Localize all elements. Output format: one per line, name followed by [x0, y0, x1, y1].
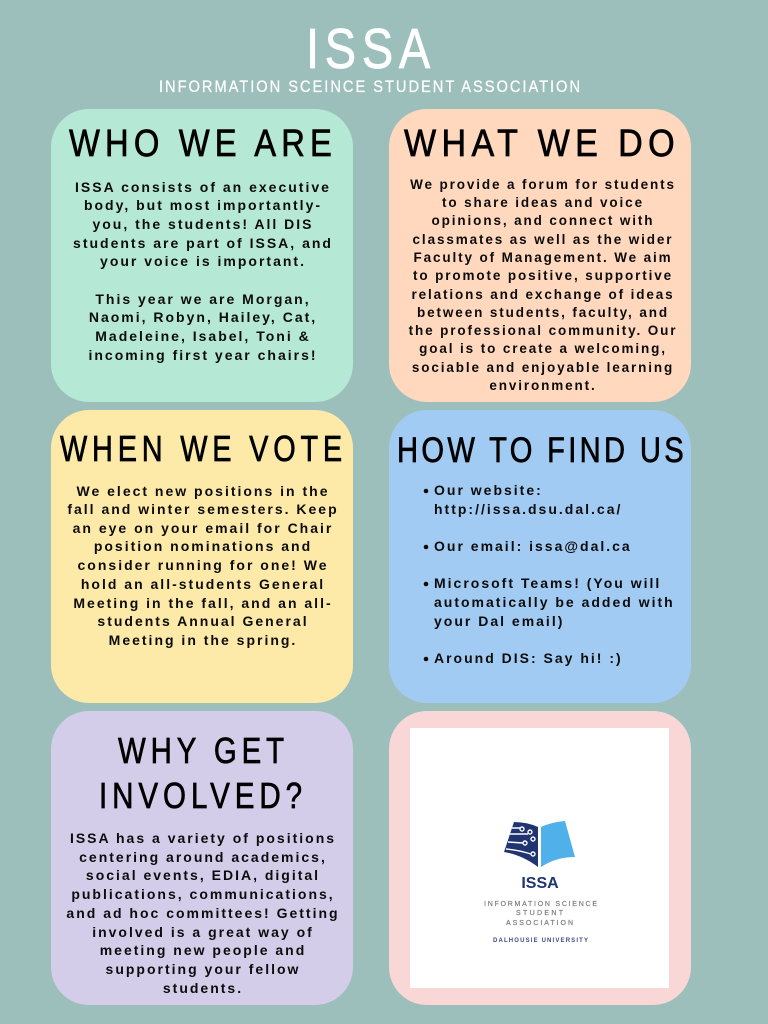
heading: what we do: WHAT WE DO: [404, 123, 680, 165]
heading: why get involved: INVOLVED?: [99, 775, 307, 816]
text: what we do body: relations and exchange of ideas: [411, 287, 675, 302]
list: contact options: Our website:: [434, 482, 543, 498]
text: who we are body: This year we are Morgan,: [95, 291, 311, 307]
text: when we vote body: consider running for one! We: [78, 557, 328, 573]
heading: when we vote: WHEN WE VOTE: [60, 428, 347, 469]
text: when we vote body: [67, 483, 339, 648]
list: contact options: [424, 482, 675, 666]
list: contact options: your Dal email): [434, 613, 564, 629]
text: who we are body: body, but most importantly-: [84, 197, 322, 213]
text: why get involved body: involved is a great way of: [92, 924, 314, 940]
logo wordmark: DALHOUSIE UNIVERSITY: [493, 938, 588, 944]
text: what we do body: We provide a forum for students: [410, 177, 676, 192]
title: ISSA: [306, 17, 436, 81]
text: what we do body: opinions, and connect with: [432, 213, 654, 228]
panel: when we vote: [51, 410, 353, 703]
heading: why get involved: WHY GET: [118, 730, 289, 771]
title: INFORMATION SCEINCE STUDENT ASSOCIATION: [159, 78, 582, 96]
text: why get involved body: publications, communications,: [71, 886, 335, 902]
text: who we are body: Madeleine, Isabel, Toni &: [95, 328, 311, 344]
text: why get involved body: supporting your fellow: [106, 961, 300, 977]
text: when we vote body: hold an all-students General: [81, 576, 325, 592]
text: what we do body: the professional community. Our: [409, 323, 677, 338]
title: [159, 17, 582, 96]
logo wordmark: ISSA: [521, 875, 559, 892]
heading: how to find us: HOW TO FIND US: [397, 431, 687, 470]
list: contact options: Microsoft Teams! (You will: [434, 575, 661, 591]
text: what we do body: to share ideas and voice: [442, 195, 644, 210]
text: what we do body: [409, 177, 677, 393]
list: contact options: Our email: issa@dal.ca: [434, 538, 632, 554]
panel: how to find us: [389, 410, 691, 703]
text: who we are body: Naomi, Robyn, Hailey, Cat,: [89, 309, 317, 325]
text: when we vote body: position nominations and: [94, 538, 312, 554]
panel: what we do: [389, 109, 691, 402]
text: what we do body: Faculty of Management. We aim: [413, 250, 673, 265]
text: when we vote body: fall and winter semesters. Keep: [67, 501, 339, 517]
text: who we are body: students are part of ISSA, and: [73, 235, 333, 251]
text: who we are body: your voice is important.: [100, 253, 306, 269]
text: what we do body: goal is to create a welcoming,: [419, 341, 667, 356]
text: why get involved body: centering around academics,: [79, 849, 327, 865]
text: when we vote body: We elect new positions in the: [76, 483, 330, 499]
logo wordmark: [484, 875, 597, 944]
list: contact options: http://issa.dsu.dal.ca/: [434, 501, 622, 517]
text: what we do body: sociable and enjoyable learning: [412, 360, 674, 375]
logo wordmark: INFORMATION SCIENCE: [484, 901, 597, 908]
text: who we are body: incoming first year chairs!: [88, 347, 318, 363]
text: what we do body: to promote positive, supportive: [413, 268, 673, 283]
text: who we are body: you, the students! All DIS: [92, 216, 314, 232]
text: why get involved body: ISSA has a variety of positions: [70, 830, 336, 846]
text: who we are body: [73, 179, 333, 363]
panel: who we are: [51, 109, 353, 402]
heading: why get involved: [99, 730, 307, 816]
text: why get involved body: meeting new people and: [100, 942, 306, 958]
text: why get involved body: social events, EDIA, digital: [86, 867, 320, 883]
text: what we do body: classmates as well as the wider: [413, 232, 673, 247]
list: contact options: Around DIS: Say hi! :): [434, 650, 623, 666]
text: who we are body: ISSA consists of an executive: [75, 179, 331, 195]
logo wordmark: STUDENT: [516, 910, 564, 917]
text: why get involved body: [66, 830, 340, 996]
text: when we vote body: an eye on your email for Chair: [73, 520, 333, 536]
text: when we vote body: students Annual General: [97, 613, 309, 629]
text: what we do body: environment.: [489, 378, 597, 393]
text: what we do body: between students, faculty, and: [417, 305, 669, 320]
text: why get involved body: students.: [163, 980, 243, 996]
heading: who we are: WHO WE ARE: [69, 123, 337, 165]
icon: open book logo: [504, 821, 575, 867]
text: when we vote body: Meeting in the fall, and an all-: [73, 595, 333, 611]
text: why get involved body: and ad hoc committees! Getting: [66, 905, 340, 921]
panel: logo: [389, 711, 691, 1005]
text: when we vote body: Meeting in the spring.: [109, 632, 297, 648]
logo wordmark: ASSOCIATION: [506, 920, 573, 927]
panel: why get involved: [51, 711, 353, 1005]
list: contact options: automatically be added with: [434, 594, 675, 610]
